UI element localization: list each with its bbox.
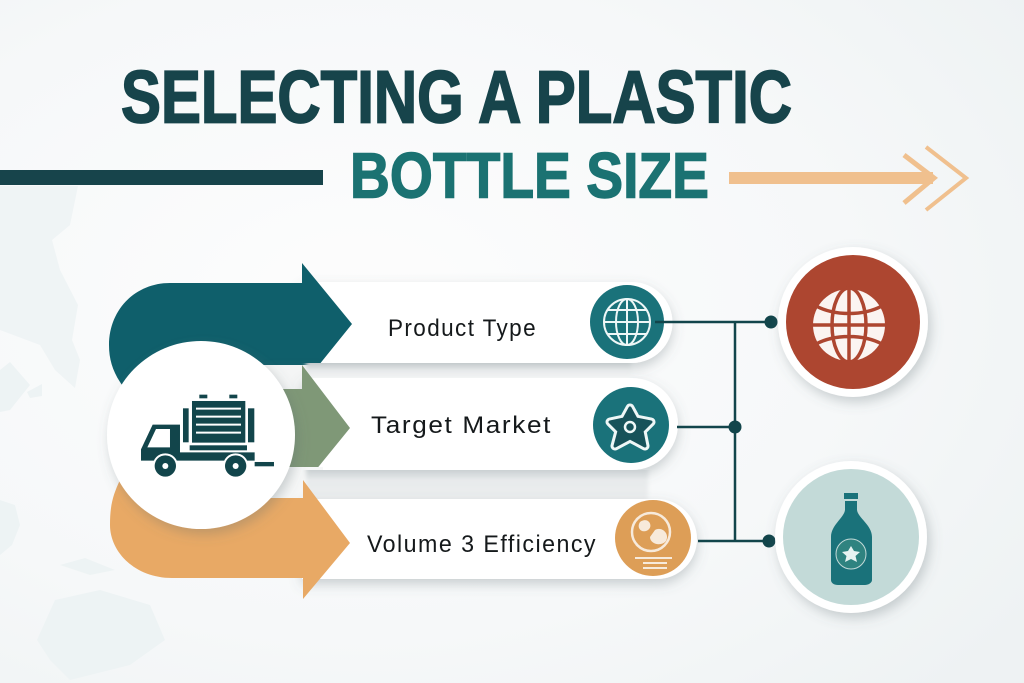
icon: bottle circle (775, 461, 927, 613)
left dark bar (0, 170, 323, 185)
pill: volume and efficiency (110, 467, 697, 599)
label: Target Market (371, 412, 552, 439)
label: Volume 3 Efficiency (367, 531, 597, 558)
pill: target market (260, 363, 678, 487)
arrow: green (260, 365, 350, 487)
icon: desk globe (615, 500, 691, 576)
label: Product Type (388, 315, 537, 342)
icon: star (593, 387, 669, 463)
pill: product type (109, 263, 672, 400)
icon: red globe circle (778, 247, 928, 397)
heading line 2: BOTTLE SIZE (350, 140, 709, 212)
heading line 1: SELECTING A PLASTIC (121, 56, 792, 138)
panel: three arrows and pills (109, 263, 697, 599)
arrow: teal (109, 263, 352, 400)
central truck badge (107, 341, 295, 529)
connector lines (655, 316, 778, 548)
arrow: orange double chevron (729, 147, 966, 210)
icon: globe (590, 285, 664, 359)
icon: truck (141, 395, 274, 479)
arrow: orange (110, 480, 350, 599)
title (121, 56, 792, 212)
